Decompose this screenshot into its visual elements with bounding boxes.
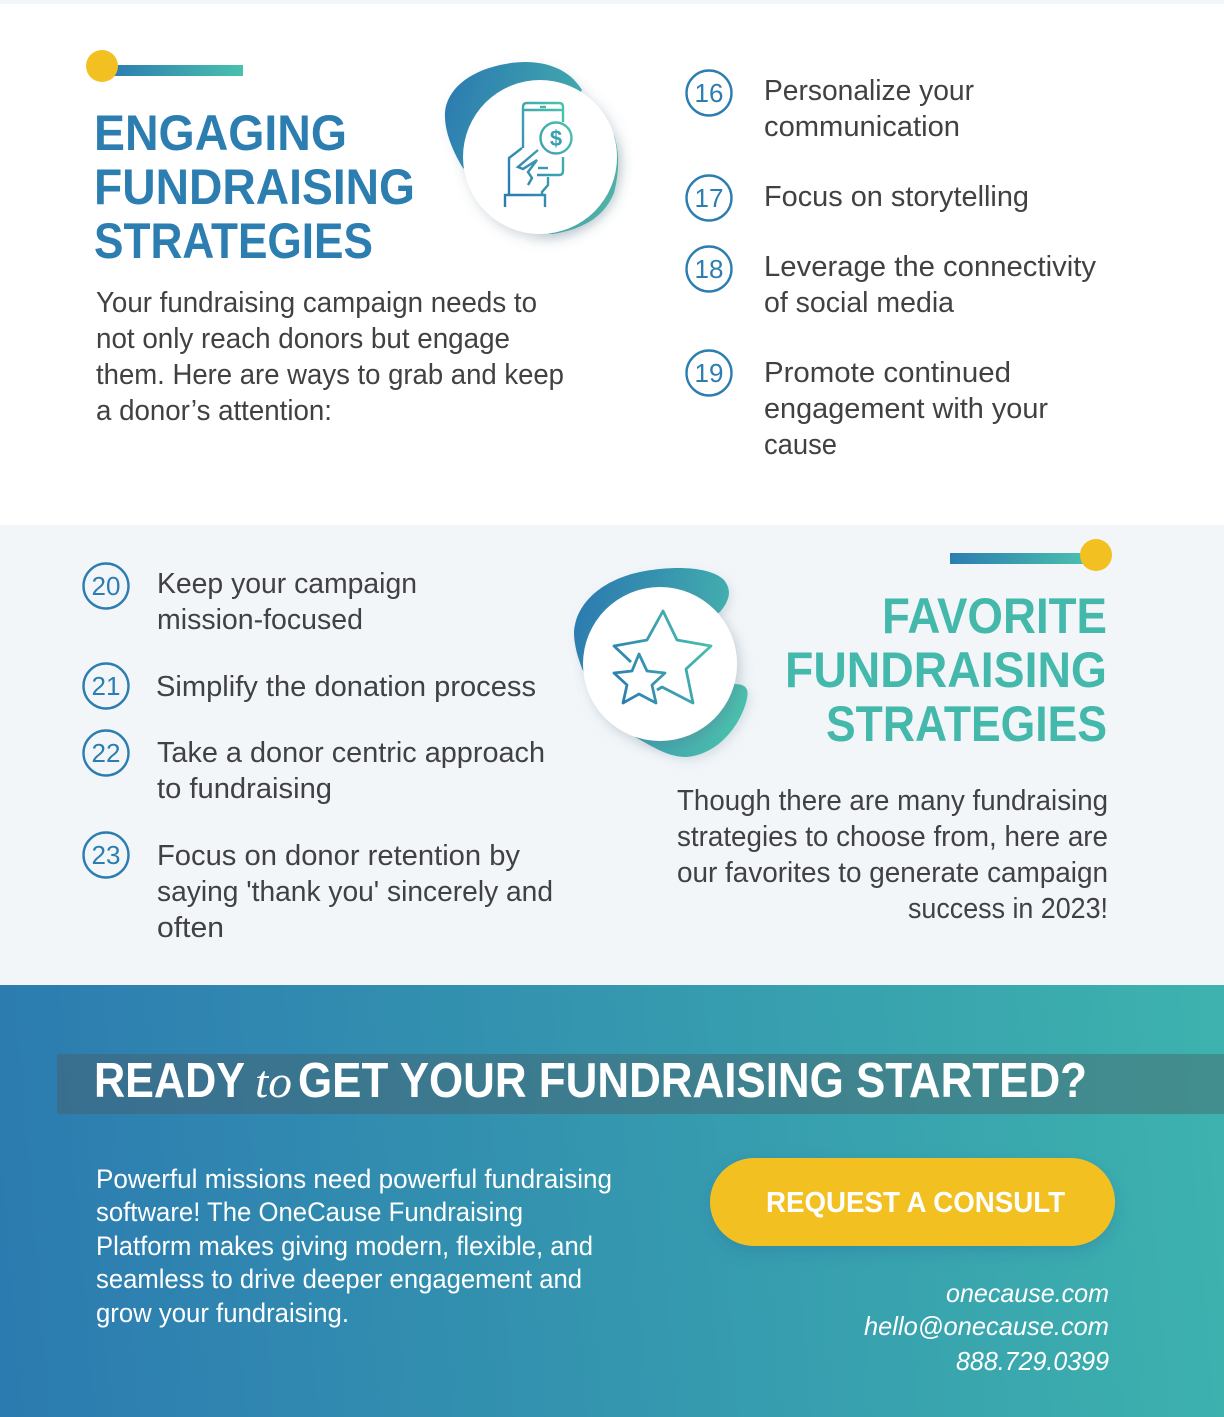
heading band: READY [94,1054,245,1108]
intro text: them. Here are ways to grab and keep [96,359,564,391]
panel: list items 16 to 19 [686,70,1096,461]
heading: favorite fundraising strategies: FUNDRAISING [785,642,1107,698]
item 22: 22 [92,738,120,768]
heading: favorite fundraising strategies: FAVORITE [882,588,1107,644]
item 23 [84,832,553,944]
item 19: cause [764,429,837,461]
icon: phone donation: $ [550,126,562,151]
heading: engaging fundraising strategies [94,105,415,269]
intro text [96,287,564,427]
body text: software! The OneCause Fundraising [96,1197,523,1227]
body text: Powerful missions need powerful fundraising [96,1164,612,1194]
item 19 [686,350,1048,461]
intro text: not only reach donors but engage [96,323,510,355]
heading: engaging fundraising strategies: STRATEGIES [94,213,373,269]
panel: favorite fundraising strategies [0,525,1224,985]
heading band: GET YOUR FUNDRAISING STARTED? [298,1054,1087,1108]
item 23: often [157,912,224,944]
heading band: to [255,1056,292,1107]
item 22 [84,730,545,805]
heading: engaging fundraising strategies: FUNDRAISING [94,159,415,215]
top strip [0,0,1224,4]
item 20: mission-focused [157,604,363,636]
item 16: Personalize your [764,75,974,107]
accent bar with dot [86,50,243,82]
item 22: to fundraising [157,773,332,805]
intro text: a donor’s attention: [96,395,332,427]
item 21: 21 [92,671,120,701]
item 17 [686,176,1029,220]
button: request a consult: REQUEST A CONSULT [766,1187,1065,1219]
contact details [864,1278,1109,1376]
heading: engaging fundraising strategies: ENGAGING [94,105,347,161]
intro text [677,785,1108,925]
intro text: Though there are many fundraising [677,785,1108,817]
contact details: onecause.com [946,1278,1109,1308]
item 19: 19 [695,358,723,388]
item 21: Simplify the donation process [156,671,536,703]
item 19: engagement with your [764,393,1048,425]
contact details: 888.729.0399 [956,1346,1109,1376]
heading: favorite fundraising strategies [785,588,1107,752]
heading band [57,1054,1224,1114]
item 20: 20 [92,571,120,601]
item 18: 18 [695,254,723,284]
item 21 [84,664,536,708]
item 17: Focus on storytelling [764,181,1029,213]
item 16 [686,70,974,143]
panel: engaging fundraising strategies [86,50,618,427]
body text: seamless to drive deeper engagement and [96,1264,582,1294]
item 18: of social media [764,287,955,319]
item 20: Keep your campaign [157,568,417,600]
intro text: our favorites to generate campaign [677,857,1108,889]
icon: phone donation [445,62,618,234]
item 23: 23 [92,840,120,870]
contact details: hello@onecause.com [864,1311,1109,1341]
item 23: Focus on donor retention by [157,840,520,872]
item 23: saying 'thank you' sincerely and [157,876,553,908]
button: request a consult [710,1158,1115,1246]
item 19: Promote continued [764,357,1011,389]
icon: stars [574,568,748,757]
panel: list items 20 to 23 [84,564,553,944]
panel: call to action [0,985,1224,1417]
item 18 [686,246,1096,319]
intro text: success in 2023! [908,893,1108,925]
heading: favorite fundraising strategies: STRATEGIES [826,696,1107,752]
item 22: Take a donor centric approach [157,737,545,769]
body text: Platform makes giving modern, flexible, and [96,1231,593,1261]
accent bar with dot [950,539,1112,571]
intro text: strategies to choose from, here are [677,821,1108,853]
item 17: 17 [695,183,723,213]
body text [96,1164,612,1328]
item 18: Leverage the connectivity [764,251,1096,283]
item 16: 16 [695,78,723,108]
item 16: communication [764,111,960,143]
body text: grow your fundraising. [96,1298,349,1328]
item 20 [84,564,417,636]
intro text: Your fundraising campaign needs to [96,287,537,319]
